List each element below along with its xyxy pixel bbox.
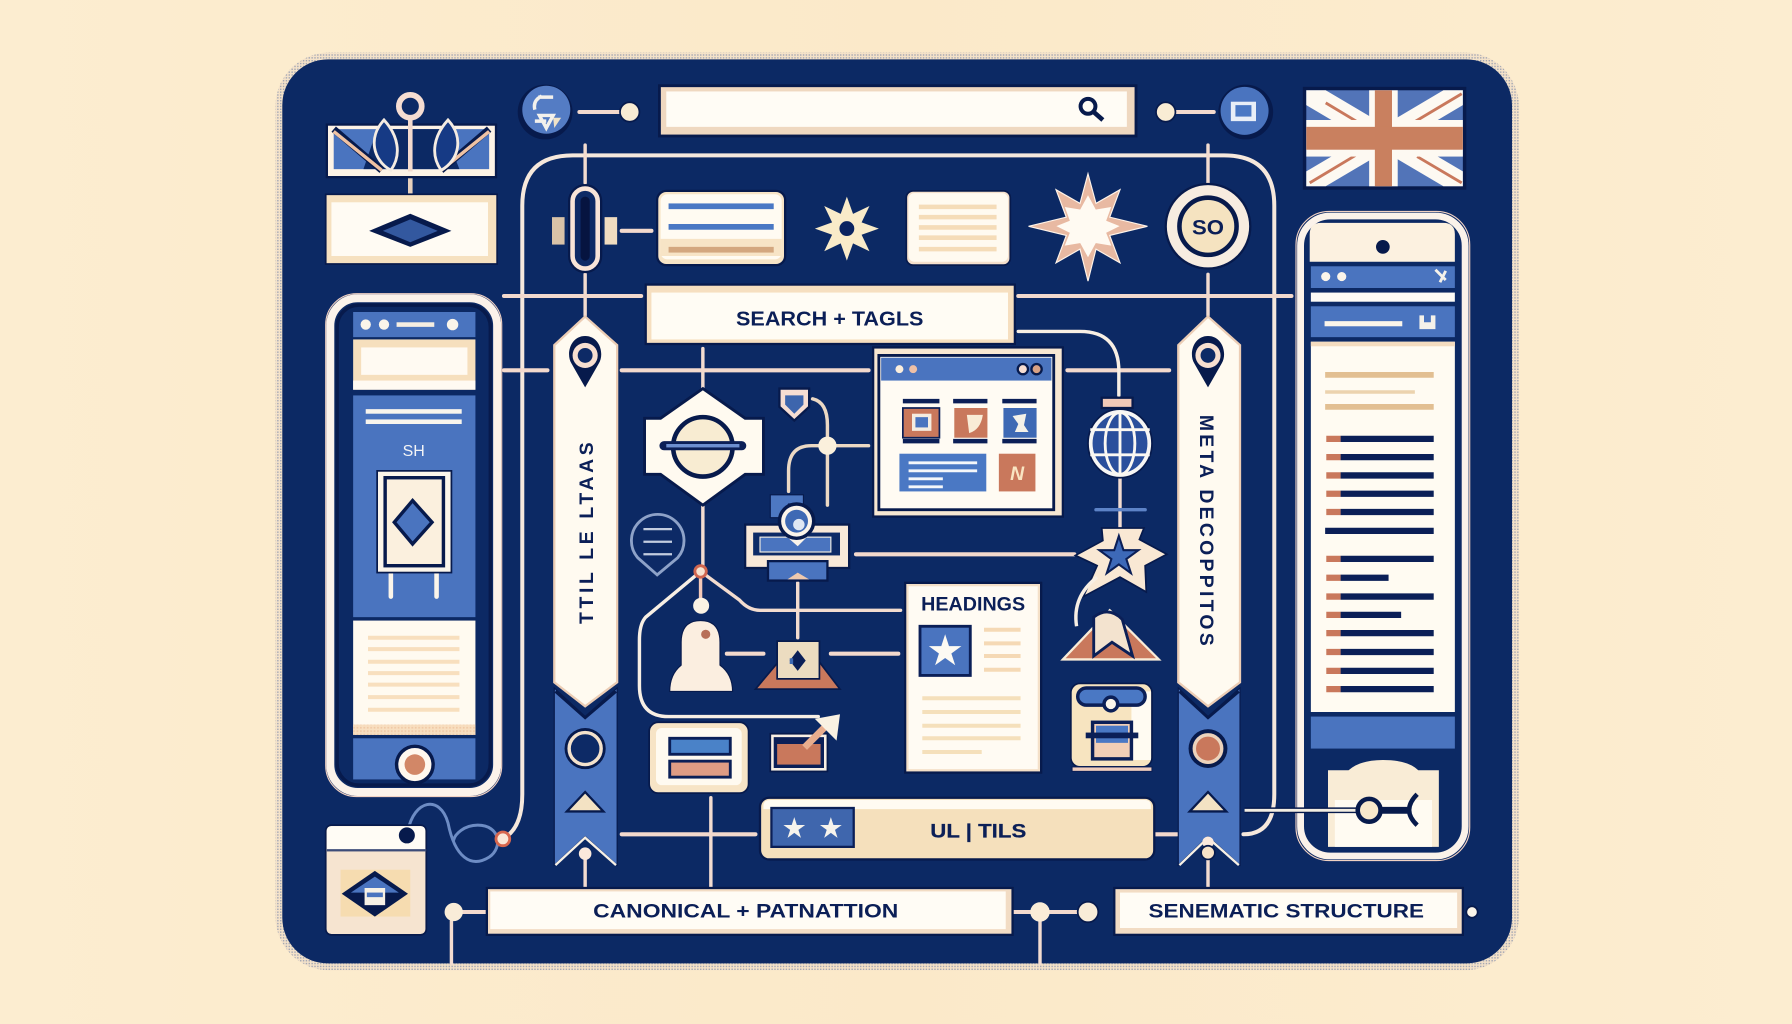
search bar (659, 86, 1136, 136)
article text (1311, 342, 1455, 712)
icon: box on base (755, 641, 840, 689)
ribbon tail (554, 688, 617, 865)
search panel (353, 339, 475, 390)
icon: calendar card (326, 825, 426, 935)
connector dot right (1156, 102, 1175, 122)
lower text panel (353, 621, 475, 735)
icon: globe button (518, 85, 573, 139)
icon: machine (1071, 683, 1152, 771)
card: stacked bars (649, 722, 749, 793)
icon: window button (1218, 85, 1273, 139)
salmon tile (999, 454, 1035, 491)
heading box: canonical (487, 888, 1013, 935)
star tile (920, 626, 970, 675)
main navy panel (275, 53, 1519, 970)
heading box: semantic structure (1114, 888, 1463, 935)
badge: SO: SO (1192, 214, 1224, 239)
ribbon: meta descriptions (1178, 317, 1240, 865)
icon: sign (377, 471, 451, 597)
key connector (1245, 794, 1417, 825)
tile 3 (1002, 401, 1037, 441)
title bar (881, 358, 1051, 381)
end dot (1466, 906, 1478, 918)
heading box: search tags (646, 285, 1015, 344)
home bar (353, 738, 475, 783)
card: blue bars (657, 191, 785, 265)
document: headings (905, 583, 1041, 773)
salmon tile: N (1010, 463, 1025, 485)
icon: speech bubble (631, 514, 684, 575)
heading box: semantic structure: SENEMATIC STRUCTURE (1149, 901, 1424, 923)
browser window (873, 347, 1063, 517)
browser bar (1311, 266, 1455, 288)
ribbon tail (1178, 688, 1240, 865)
document: headings: HEADINGS (921, 593, 1025, 615)
bar: url titles (760, 798, 1154, 859)
blue content panel: SH (403, 443, 425, 460)
tile 1 (903, 399, 939, 443)
node: salmon (695, 566, 706, 577)
badge: SO (1165, 183, 1251, 270)
icon: bell (670, 621, 733, 691)
card: text lines (906, 191, 1010, 265)
star tile (771, 808, 854, 847)
label: title tags: TTIL LE LTAAS (576, 442, 598, 624)
label: meta descriptions: META DECOPPITOS (1195, 415, 1217, 646)
ribbon: title tags (554, 317, 617, 865)
nodes: canonical connector (1030, 902, 1098, 922)
node: cream (693, 598, 709, 614)
address bar (1311, 306, 1455, 337)
icon: map pin (569, 336, 601, 387)
icon: badge with ring (645, 389, 763, 505)
icon: magnifier (1081, 99, 1103, 120)
heading box: search tags: SEARCH + TAGLS (736, 308, 923, 331)
icon: arrow box (770, 714, 840, 771)
phone right (1296, 211, 1470, 861)
camera header (1310, 223, 1455, 262)
icon: globe (1088, 398, 1152, 478)
icon: shield (779, 389, 809, 421)
connector lines (408, 112, 1291, 963)
icon: tent bookmark (1063, 610, 1159, 659)
icon: fountain (745, 495, 849, 581)
icon: star with tail (1075, 528, 1167, 626)
icon: sun (815, 197, 879, 261)
content block (899, 454, 986, 491)
flag (1303, 87, 1466, 190)
icon: pill link (552, 184, 617, 273)
icon: diamond card (326, 194, 497, 264)
icon: leaf emblem (327, 95, 496, 194)
node (818, 437, 837, 455)
blue content panel (353, 395, 475, 617)
connector dot (620, 102, 639, 122)
icon: map pin (1192, 336, 1224, 387)
node: salmon link (496, 832, 510, 846)
blue footer (1311, 717, 1455, 749)
icon: big star (1029, 174, 1147, 281)
phone left (326, 294, 502, 797)
main rounded connector (503, 155, 1274, 839)
browser bar (353, 312, 475, 337)
bar: url titles: UL | TILS (930, 821, 1026, 843)
tile 2 (953, 401, 987, 441)
heading box: canonical: CANONICAL + PATNATTION (593, 901, 898, 923)
lock card (1328, 760, 1439, 847)
node: left connector (445, 903, 463, 921)
